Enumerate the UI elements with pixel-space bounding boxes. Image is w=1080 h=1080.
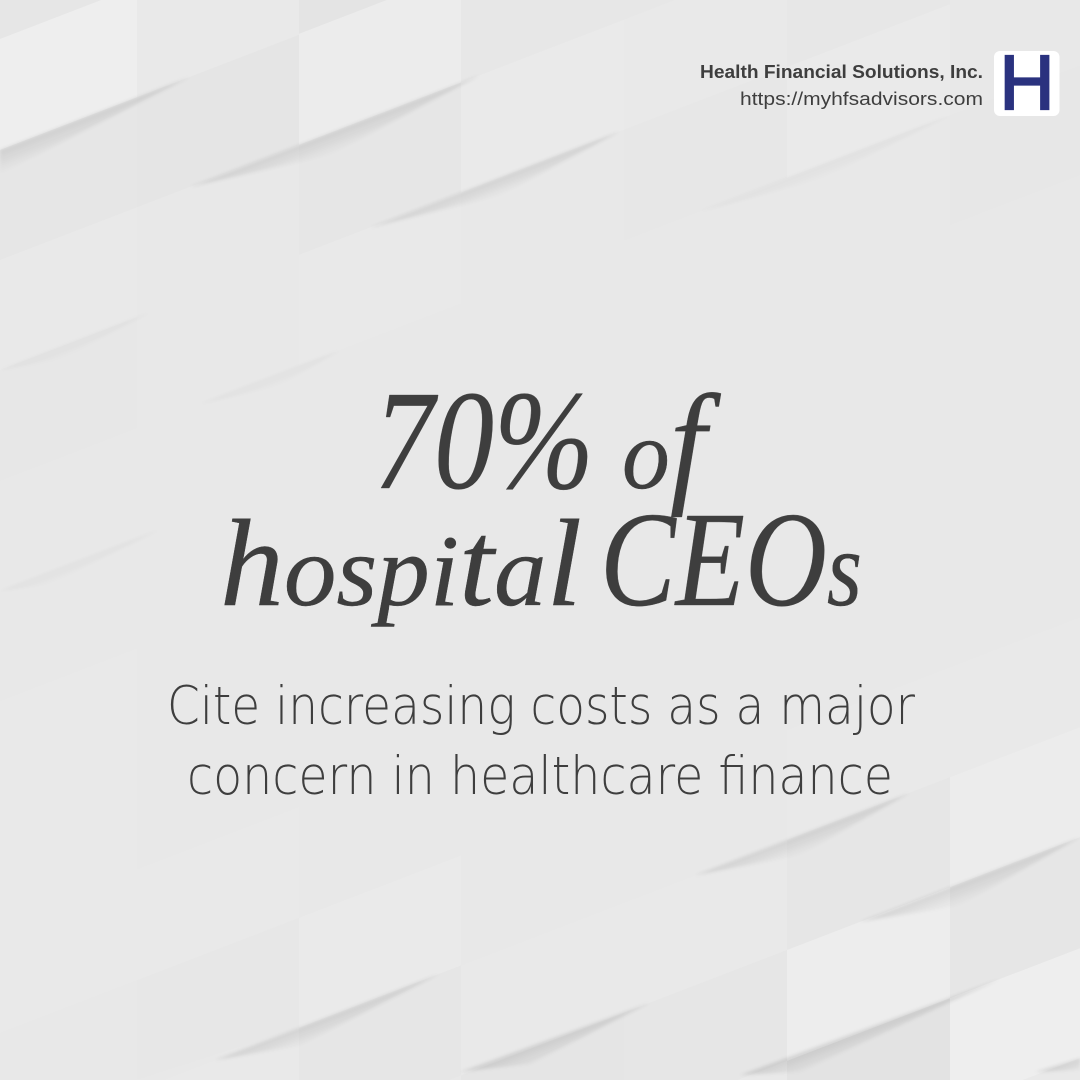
header: company name and website — [700, 62, 983, 109]
website url: https://myhfsadvisors.com — [740, 88, 983, 109]
logo: white tile with navy H: H — [1000, 40, 1054, 126]
heading line 1: of — [622, 368, 722, 518]
subtitle line 1: Cite increasing costs as a major — [167, 676, 915, 737]
heading line 2: CEOs — [600, 485, 862, 635]
company name: Health Financial Solutions, Inc. — [700, 62, 983, 82]
heading line 2 — [220, 485, 862, 635]
heading: 70% of hospital CEOs — [220, 361, 862, 635]
heading line 2: hospital — [220, 495, 582, 632]
subtitle text — [167, 676, 915, 807]
heading line 1: 70% — [374, 361, 594, 519]
subtitle line 2: concern in healthcare finance — [187, 746, 893, 807]
